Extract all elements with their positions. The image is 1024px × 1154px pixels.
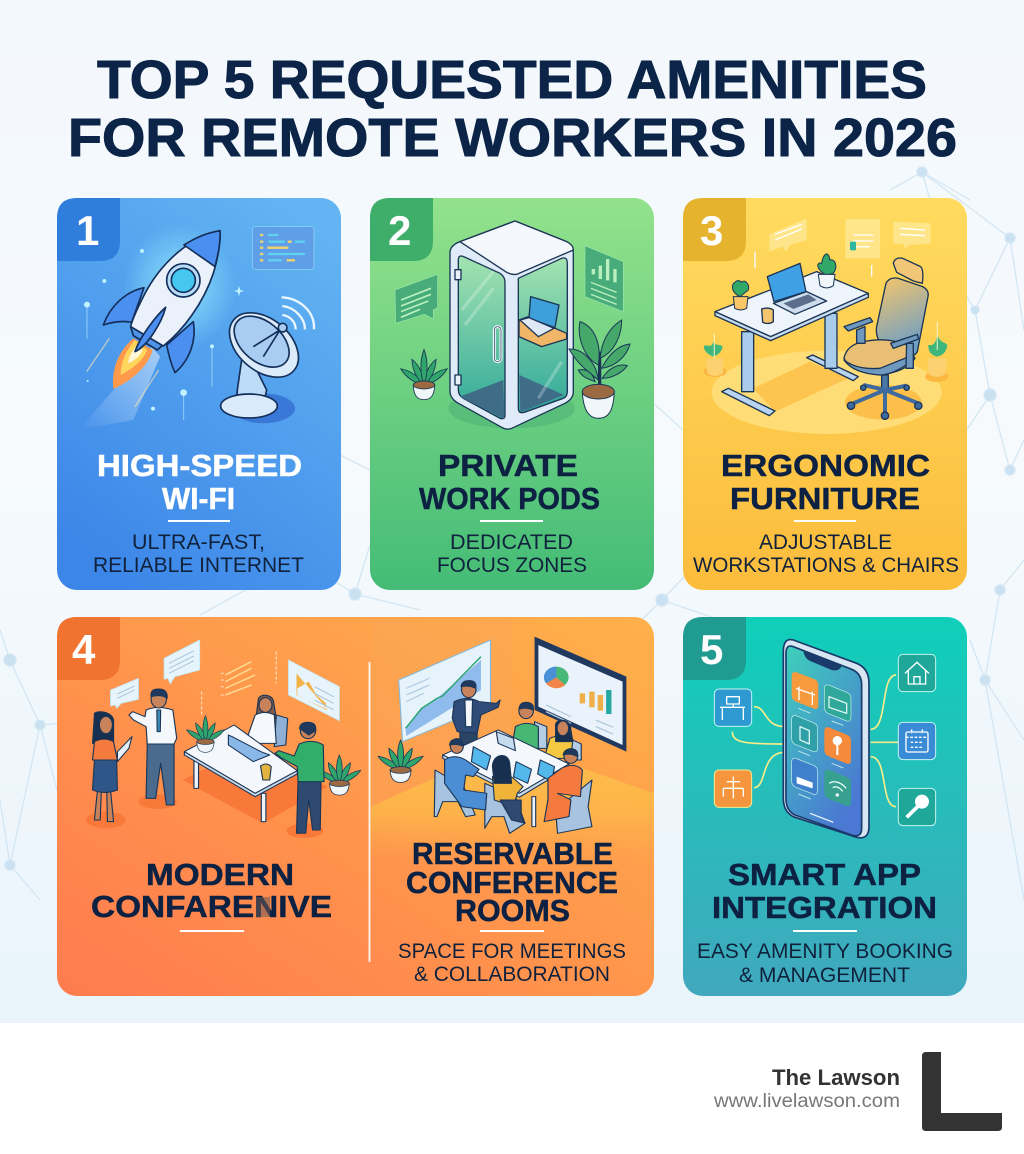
side icons	[714, 654, 936, 826]
meeting table with laptops	[443, 730, 569, 827]
side plants	[703, 322, 948, 382]
heading: reservable conference rooms: ROOMS	[455, 893, 570, 928]
description: FOCUS ZONES	[437, 554, 587, 577]
badge 1	[57, 198, 120, 261]
heading: WORK PODS	[419, 481, 600, 516]
connectors	[732, 675, 898, 807]
description: ULTRA-FAST,	[132, 531, 265, 554]
badge 3	[683, 198, 746, 261]
satellite dish	[217, 300, 311, 423]
panel: private work pods	[370, 198, 654, 590]
description	[93, 531, 304, 577]
description	[398, 940, 626, 986]
description: RELIABLE INTERNET	[93, 554, 304, 577]
floating notes	[755, 218, 931, 277]
website: www.livelawson.com	[713, 1091, 900, 1112]
heading: INTEGRATION	[712, 890, 937, 925]
description: SPACE FOR MEETINGS	[398, 940, 626, 963]
icon: smartphone with connected apps	[714, 640, 936, 838]
desk	[715, 263, 868, 416]
desk plants	[732, 254, 836, 310]
badge 4	[57, 617, 120, 680]
panel: ergonomic furniture	[683, 198, 967, 590]
illustration: reservable conference room	[370, 636, 654, 844]
phone	[783, 640, 869, 838]
heading	[419, 448, 600, 516]
heading: HIGH-SPEED	[97, 448, 302, 483]
app tiles	[792, 672, 851, 806]
floating chart panel	[585, 246, 623, 312]
heading: modern conference: MODERN	[146, 857, 294, 892]
heading: FURNITURE	[730, 481, 920, 516]
badge 1: 1	[76, 207, 99, 254]
front attendees and chairs	[434, 739, 592, 833]
logo L	[922, 1052, 1002, 1131]
heading	[721, 448, 930, 516]
description: WORKSTATIONS & CHAIRS	[693, 554, 959, 577]
brand name: The Lawson	[772, 1065, 900, 1090]
network background	[0, 167, 1024, 900]
panel: smart app integration	[683, 617, 967, 996]
heading	[97, 448, 302, 516]
panel: high-speed wi-fi	[57, 198, 341, 590]
icon: standing desk and chair	[703, 218, 948, 434]
code panel	[252, 227, 314, 269]
heading: PRIVATE	[438, 448, 578, 483]
badge 2: 2	[388, 207, 411, 254]
heading: WI-FI	[162, 481, 235, 516]
badge 5: 5	[700, 626, 723, 673]
plant right	[569, 320, 630, 418]
description	[697, 940, 953, 987]
heading	[712, 857, 937, 925]
divider	[368, 662, 370, 962]
heading: SMART APP	[728, 857, 921, 892]
icon: phone booth work pod with plants	[395, 221, 630, 429]
description: ADJUSTABLE	[759, 531, 892, 554]
badge 3: 3	[700, 207, 723, 254]
description	[437, 531, 587, 577]
plants	[185, 716, 226, 752]
wall screen with line chart	[399, 640, 491, 742]
heading: reservable conference rooms	[406, 836, 618, 928]
plant	[376, 740, 425, 782]
illustration: modern conference team	[86, 640, 362, 838]
heading: modern conference	[91, 857, 332, 924]
badge 5	[683, 617, 746, 680]
description	[693, 531, 959, 577]
heading: reservable conference rooms: CONFERENCE	[406, 865, 618, 900]
title	[68, 50, 957, 168]
back attendees	[512, 702, 581, 760]
heading: reservable conference rooms: RESERVABLE	[412, 836, 613, 871]
title: FOR REMOTE WORKERS IN 2026	[68, 108, 957, 168]
badge 2	[370, 198, 433, 261]
badge 4: 4	[72, 626, 96, 673]
title: TOP 5 REQUESTED AMENITIES	[97, 50, 927, 110]
floating bubbles and chart	[111, 640, 339, 721]
standing man	[129, 689, 177, 805]
panel: conference spaces	[57, 617, 654, 996]
table	[184, 725, 297, 822]
chair	[844, 258, 928, 419]
floating chat panel	[395, 274, 438, 323]
description: DEDICATED	[450, 531, 573, 554]
description: & MANAGEMENT	[739, 964, 910, 987]
icon: rocket and satellite dish	[78, 223, 314, 430]
heading: ERGONOMIC	[721, 448, 930, 483]
heading: modern conference: CONFARENIVE	[91, 889, 332, 924]
pod	[450, 221, 573, 429]
wall display with pie and bar chart	[535, 637, 626, 752]
woman with tablet	[93, 712, 132, 822]
description: EASY AMENITY BOOKING	[697, 940, 953, 963]
seated woman	[246, 695, 288, 747]
description: & COLLABORATION	[414, 963, 610, 986]
plant left	[399, 350, 449, 400]
footer	[0, 1023, 1024, 1154]
man in green	[275, 722, 324, 833]
presenter	[452, 680, 501, 745]
